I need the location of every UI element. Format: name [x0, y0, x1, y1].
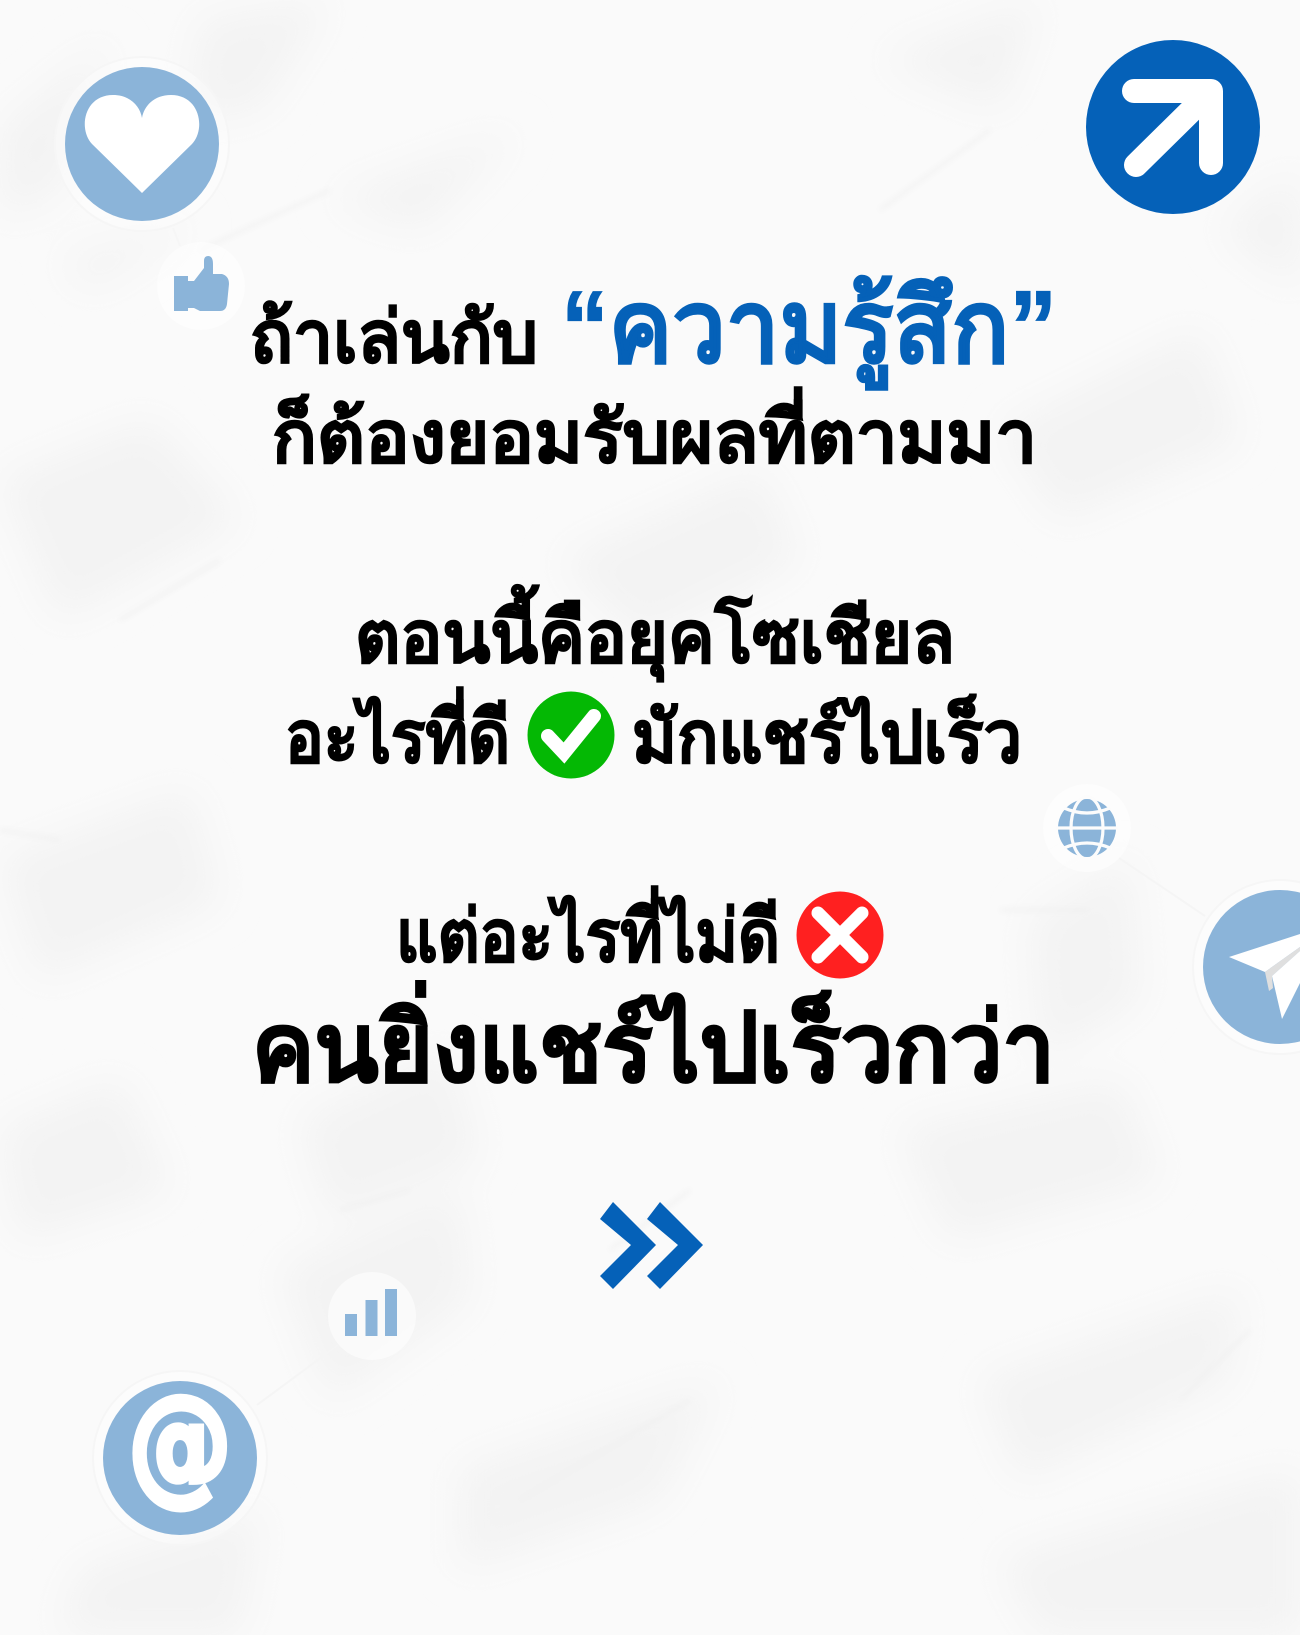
icon: bar chart — [257, 1272, 416, 1405]
text line 4: มักแชร์ไปเร็ว — [632, 694, 1022, 778]
heading line 1: “ความรู้สึก” — [561, 270, 1057, 391]
text line 6: คนยิ่งแชร์ไปเร็วกว่า — [252, 980, 1055, 1102]
icon: globe — [1043, 784, 1205, 916]
icon: at sign badge: @ — [128, 1369, 232, 1518]
heading line 1: ถ้าเล่นกับ — [250, 298, 538, 378]
icon: at sign badge — [93, 1369, 267, 1545]
text line 4: อะไรที่ดี — [285, 686, 510, 778]
icon: red cross — [796, 892, 884, 978]
text line 3: ตอนนี้คือยุคโซเชียล — [355, 584, 955, 683]
icon: paper plane badge — [1193, 880, 1300, 1054]
icon: heart badge — [55, 57, 229, 231]
text line 5: แต่อะไรที่ไม่ดี — [396, 885, 780, 977]
heading line 2: ก็ต้องยอมรับผลที่ตามมา — [272, 386, 1037, 478]
icon: thumbs up — [157, 228, 245, 330]
icon: double chevron arrow — [600, 1202, 703, 1289]
icon: arrow badge — [1086, 40, 1260, 214]
heading line 1 — [250, 270, 1057, 391]
text line 4 — [285, 686, 1022, 778]
icon: green check — [528, 692, 614, 778]
